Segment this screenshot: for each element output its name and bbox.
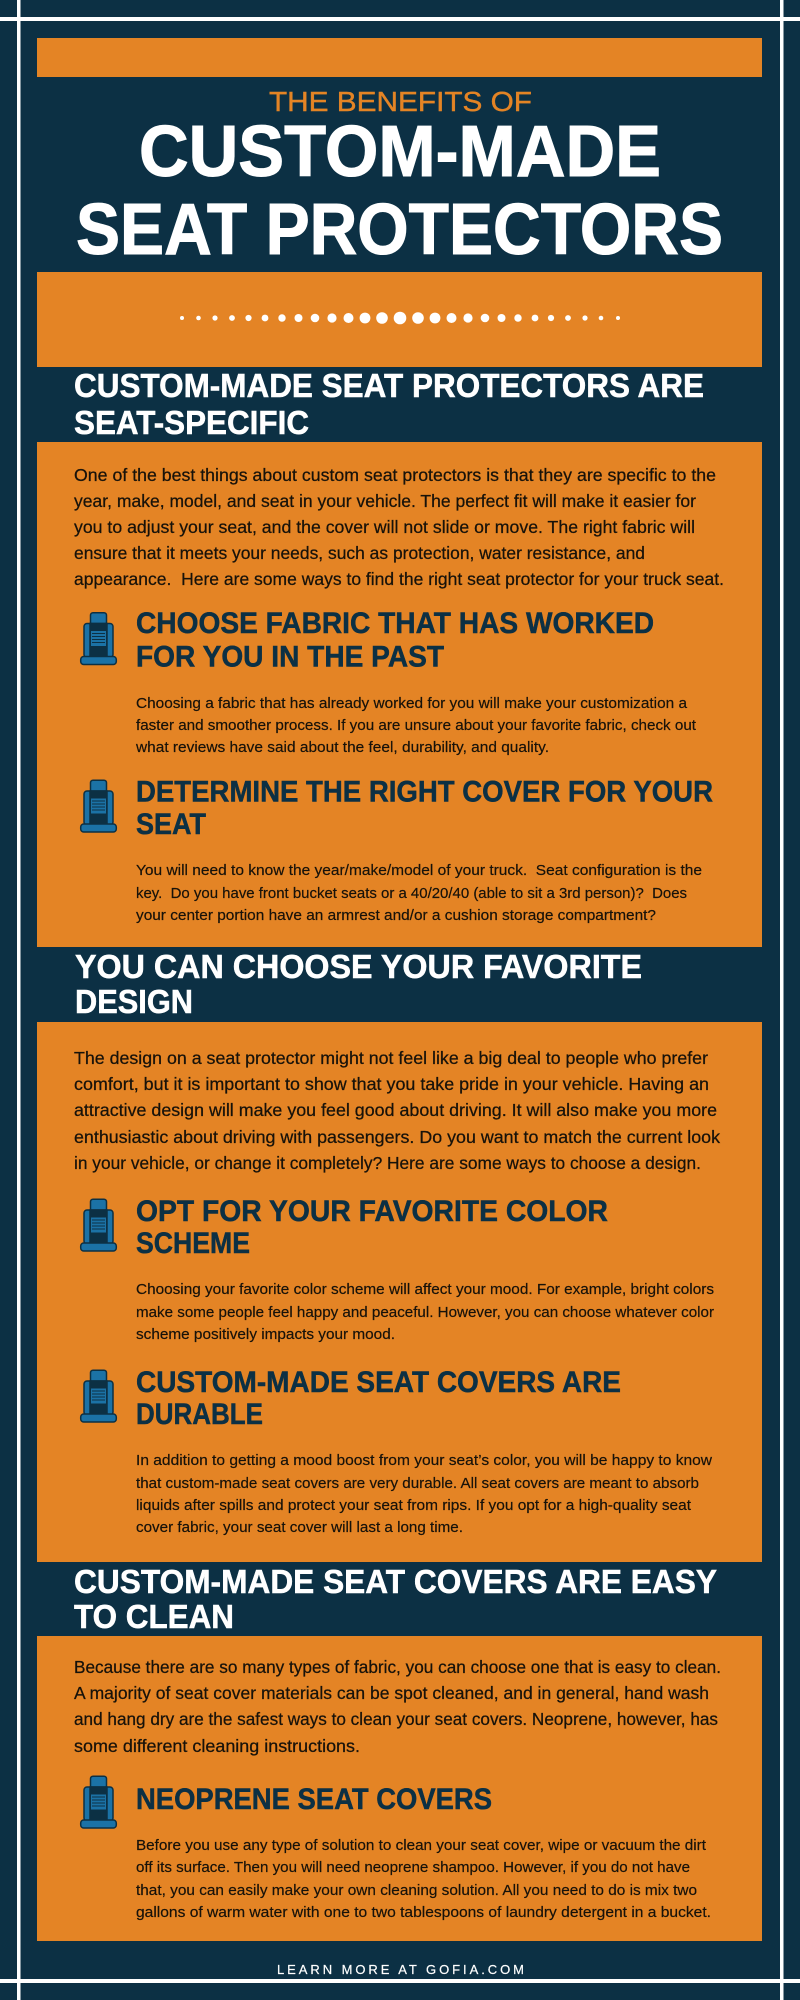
title: CUSTOM-MADE xyxy=(139,112,661,192)
intro text: seat-specific: appearance. Here are some ways to find the right seat protector for your truck seat. xyxy=(74,569,724,589)
intro text: seat-specific: you to adjust your seat, and the cover will not slide or move. The right fabric will xyxy=(74,517,695,537)
intro text: favorite design: in your vehicle, or change it completely? Here are some ways to choose a design. xyxy=(74,1153,701,1173)
icon: car seat xyxy=(81,780,116,832)
text: color scheme xyxy=(136,1281,714,1343)
subheading: choose fabric: FOR YOU IN THE PAST xyxy=(136,640,444,674)
icon: car seat xyxy=(81,1370,116,1422)
intro text: seat-specific: ensure that it meets your needs, such as protection, water resistance, and xyxy=(74,543,645,563)
text: color scheme: scheme positively impacts your mood. xyxy=(136,1326,395,1343)
intro text: easy to clean: and hang dry are the safest ways to clean your seat covers. Neoprene, however, has xyxy=(74,1709,718,1729)
subheading: color scheme: SCHEME xyxy=(136,1227,250,1260)
text: durable xyxy=(136,1452,712,1536)
text: durable: In addition to getting a mood boost from your seat’s color, you will be happy to know xyxy=(136,1452,712,1469)
text: durable: liquids after spills and protect your seat from rips. If you opt for a high-quality seat xyxy=(136,1497,692,1514)
intro text: seat-specific xyxy=(74,465,724,589)
subheading: color scheme: OPT FOR YOUR FAVORITE COLOR xyxy=(136,1195,608,1228)
section heading: seat-specific xyxy=(74,367,704,441)
text: color scheme: Choosing your favorite color scheme will affect your mood. For example, bright colors xyxy=(136,1281,714,1298)
subheading: determine cover: SEAT xyxy=(136,808,206,841)
text: determine cover: You will need to know the year/make/model of your truck. Seat configuration is the xyxy=(136,862,702,879)
text: neoprene: gallons of warm water with one to two tablespoons of laundry detergent in a bucket. xyxy=(136,1904,711,1921)
text: choose fabric xyxy=(135,695,697,756)
intro text: seat-specific: year, make, model, and seat in your vehicle. The perfect fit will make it easier for xyxy=(74,491,696,511)
text: neoprene: Before you use any type of solution to clean your seat cover, wipe or vacuum the dirt xyxy=(136,1837,707,1854)
text: durable: that custom-made seat covers are very durable. All seat covers are meant to absorb xyxy=(136,1475,699,1492)
text: determine cover: key. Do you have front bucket seats or a 40/20/40 (able to sit a 3rd person)? Does xyxy=(136,885,687,902)
intro text: easy to clean: some different cleaning instructions. xyxy=(74,1736,360,1756)
section heading: favorite design xyxy=(75,948,642,1020)
text: determine cover xyxy=(136,862,702,924)
subheading: durable: DURABLE xyxy=(136,1398,263,1431)
text: neoprene: off its surface. Then you will need neoprene shampoo. However, if you do not have xyxy=(136,1859,690,1876)
panel: seat-specific xyxy=(37,442,762,947)
intro text: favorite design: attractive design will make you feel good about driving. It will also make you more xyxy=(74,1100,717,1120)
text: determine cover: your center portion have an armrest and/or a cushion storage compartment? xyxy=(136,907,656,924)
orange divider panel with dots xyxy=(37,272,762,367)
section heading: easy to clean: CUSTOM-MADE SEAT COVERS ARE EASY xyxy=(74,1563,717,1600)
intro text: easy to clean: A majority of seat cover materials can be spot cleaned, and in general, hand wash xyxy=(74,1683,709,1703)
text: durable: cover fabric, your seat cover will last a long time. xyxy=(136,1519,463,1536)
icon: car seat xyxy=(81,1199,116,1251)
intro text: favorite design xyxy=(74,1048,720,1173)
section heading: favorite design: DESIGN xyxy=(75,983,193,1020)
section heading: seat-specific: SEAT-SPECIFIC xyxy=(74,404,309,441)
text: choose fabric: Choosing a fabric that has already worked for you will make your customization a xyxy=(136,695,688,712)
subheading: neoprene: NEOPRENE SEAT COVERS xyxy=(136,1783,492,1816)
intro text: seat-specific: One of the best things about custom seat protectors is that they are specific to the xyxy=(74,465,716,485)
subheading: determine cover: DETERMINE THE RIGHT COVER FOR YOUR xyxy=(136,776,713,808)
intro text: favorite design: enthusiastic about driving with passengers. Do you want to match the current look xyxy=(74,1127,720,1147)
text: color scheme: make some people feel happy and peaceful. However, you can choose whatever color xyxy=(136,1304,714,1321)
section heading: seat-specific: CUSTOM-MADE SEAT PROTECTORS ARE xyxy=(74,367,704,404)
section heading: easy to clean xyxy=(74,1563,717,1635)
dotted divider xyxy=(180,312,620,324)
subheading: choose fabric xyxy=(136,607,654,674)
intro text: favorite design: comfort, but it is important to show that you take pride in your vehicle. Having an xyxy=(74,1074,709,1094)
title: THE BENEFITS OF xyxy=(269,86,532,117)
text: choose fabric: what reviews have said about the feel, durability, and quality. xyxy=(135,739,549,756)
subheading: determine cover xyxy=(136,776,713,841)
text: neoprene xyxy=(136,1837,711,1921)
section heading: favorite design: YOU CAN CHOOSE YOUR FAVORITE xyxy=(75,948,642,985)
text: neoprene: that, you can easily make your own cleaning solution. All you need to do is mix two xyxy=(136,1882,697,1899)
icon: car seat xyxy=(81,613,116,664)
subheading: color scheme xyxy=(136,1195,608,1260)
subheading: choose fabric: CHOOSE FABRIC THAT HAS WORKED xyxy=(136,607,654,640)
panel: favorite design xyxy=(37,1022,762,1562)
intro text: easy to clean xyxy=(74,1657,721,1756)
title: SEAT PROTECTORS xyxy=(76,190,723,270)
title xyxy=(76,86,723,270)
top orange banner xyxy=(37,38,762,77)
subheading: durable: CUSTOM-MADE SEAT COVERS ARE xyxy=(136,1366,621,1399)
icon: car seat xyxy=(81,1776,116,1828)
intro text: easy to clean: Because there are so many types of fabric, you can choose one that is easy to clean. xyxy=(74,1657,721,1677)
text: choose fabric: faster and smoother process. If you are unsure about your favorite fabric, check out xyxy=(136,717,697,734)
section heading: easy to clean: TO CLEAN xyxy=(74,1598,234,1635)
footer: LEARN MORE AT GOFIA.COM xyxy=(277,1962,524,1977)
subheading: durable xyxy=(136,1366,621,1431)
intro text: favorite design: The design on a seat protector might not feel like a big deal to people who prefer xyxy=(74,1048,708,1068)
panel: easy to clean xyxy=(37,1636,762,1941)
